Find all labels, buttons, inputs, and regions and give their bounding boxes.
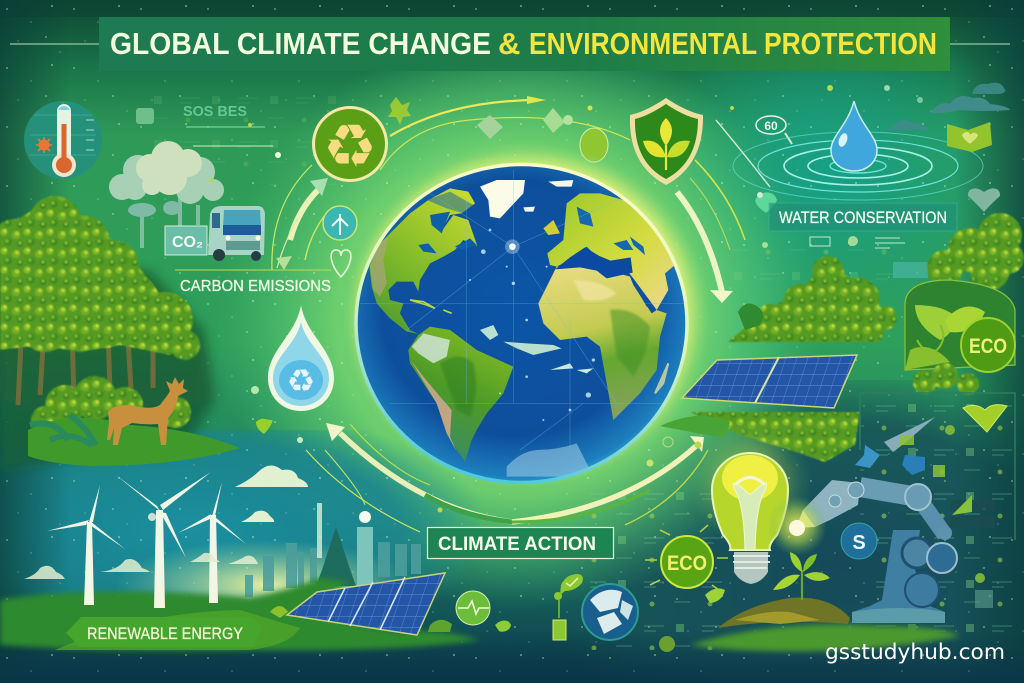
magnifier 60 icon xyxy=(756,116,792,144)
right trees xyxy=(728,213,1024,342)
tech panel with heart xyxy=(860,393,1015,608)
eco panel: ECO xyxy=(969,335,1007,358)
sprout xyxy=(773,552,830,600)
wind icon badge xyxy=(323,206,357,240)
recycle badge: ♻ xyxy=(323,112,377,182)
label: renewable energy: RENEWABLE ENERGY xyxy=(87,625,243,643)
solar panel right xyxy=(682,355,857,408)
title banner: ENVIRONMENTAL PROTECTION xyxy=(529,26,937,61)
faded label: SOS BES xyxy=(136,103,273,146)
cloud and carbon trees xyxy=(109,141,224,248)
title banner xyxy=(10,17,1010,71)
robotic arm xyxy=(796,417,957,623)
glowing light bulb xyxy=(688,420,812,584)
wind turbines xyxy=(47,472,246,608)
deer xyxy=(107,377,188,445)
label: climate action xyxy=(428,528,614,558)
faded label: SOS BES: SOS BES xyxy=(183,103,247,120)
globe icon xyxy=(582,584,638,640)
left forest xyxy=(0,196,240,470)
label: renewable energy xyxy=(66,617,262,647)
clouds on skyline xyxy=(24,465,308,579)
small yellow-green symbols xyxy=(209,85,923,512)
label: climate action: CLIMATE ACTION xyxy=(438,533,596,555)
water ripples and drop xyxy=(733,101,983,200)
globe xyxy=(342,142,710,490)
magnifier 60 icon: 60 xyxy=(764,119,778,133)
eco panel xyxy=(905,280,1015,395)
bottom-left grass xyxy=(0,578,480,650)
circular gene icon xyxy=(841,523,877,559)
CO2 box and truck xyxy=(165,206,265,261)
CO2 box and truck: CO₂ xyxy=(172,234,203,251)
watermark: gsstudyhub.com xyxy=(825,640,1005,664)
heart icon xyxy=(331,250,351,277)
label: water conservation xyxy=(769,203,957,231)
small chart marks xyxy=(810,236,928,278)
speech check icon and tag xyxy=(553,574,725,652)
recycle water drop xyxy=(268,305,334,411)
thermometer icon xyxy=(24,101,102,179)
soil mound and ground xyxy=(690,598,960,651)
ribbon heart icon xyxy=(947,122,992,152)
foliage under solar panel xyxy=(660,412,860,462)
recycle badge xyxy=(312,106,388,182)
grey heart icon xyxy=(968,188,1000,212)
shield badge xyxy=(630,98,703,185)
city skyline xyxy=(245,503,421,597)
circular gene icon: S xyxy=(852,532,866,554)
label: carbon emissions: CARBON EMISSIONS xyxy=(180,278,331,295)
wave badge xyxy=(456,591,490,625)
clouds top right xyxy=(878,83,1010,132)
label: water conservation: WATER CONSERVATION xyxy=(779,209,947,227)
solar panel bottom xyxy=(287,573,445,635)
title banner: & xyxy=(498,26,520,61)
title banner: GLOBAL CLIMATE CHANGE xyxy=(110,26,491,61)
spark xyxy=(767,496,827,556)
eco badge: ECO xyxy=(667,552,707,575)
flow arrows xyxy=(272,96,770,532)
recycle water drop: ♻ xyxy=(287,362,315,400)
eco badge xyxy=(645,525,728,592)
small plant mark xyxy=(495,620,511,632)
